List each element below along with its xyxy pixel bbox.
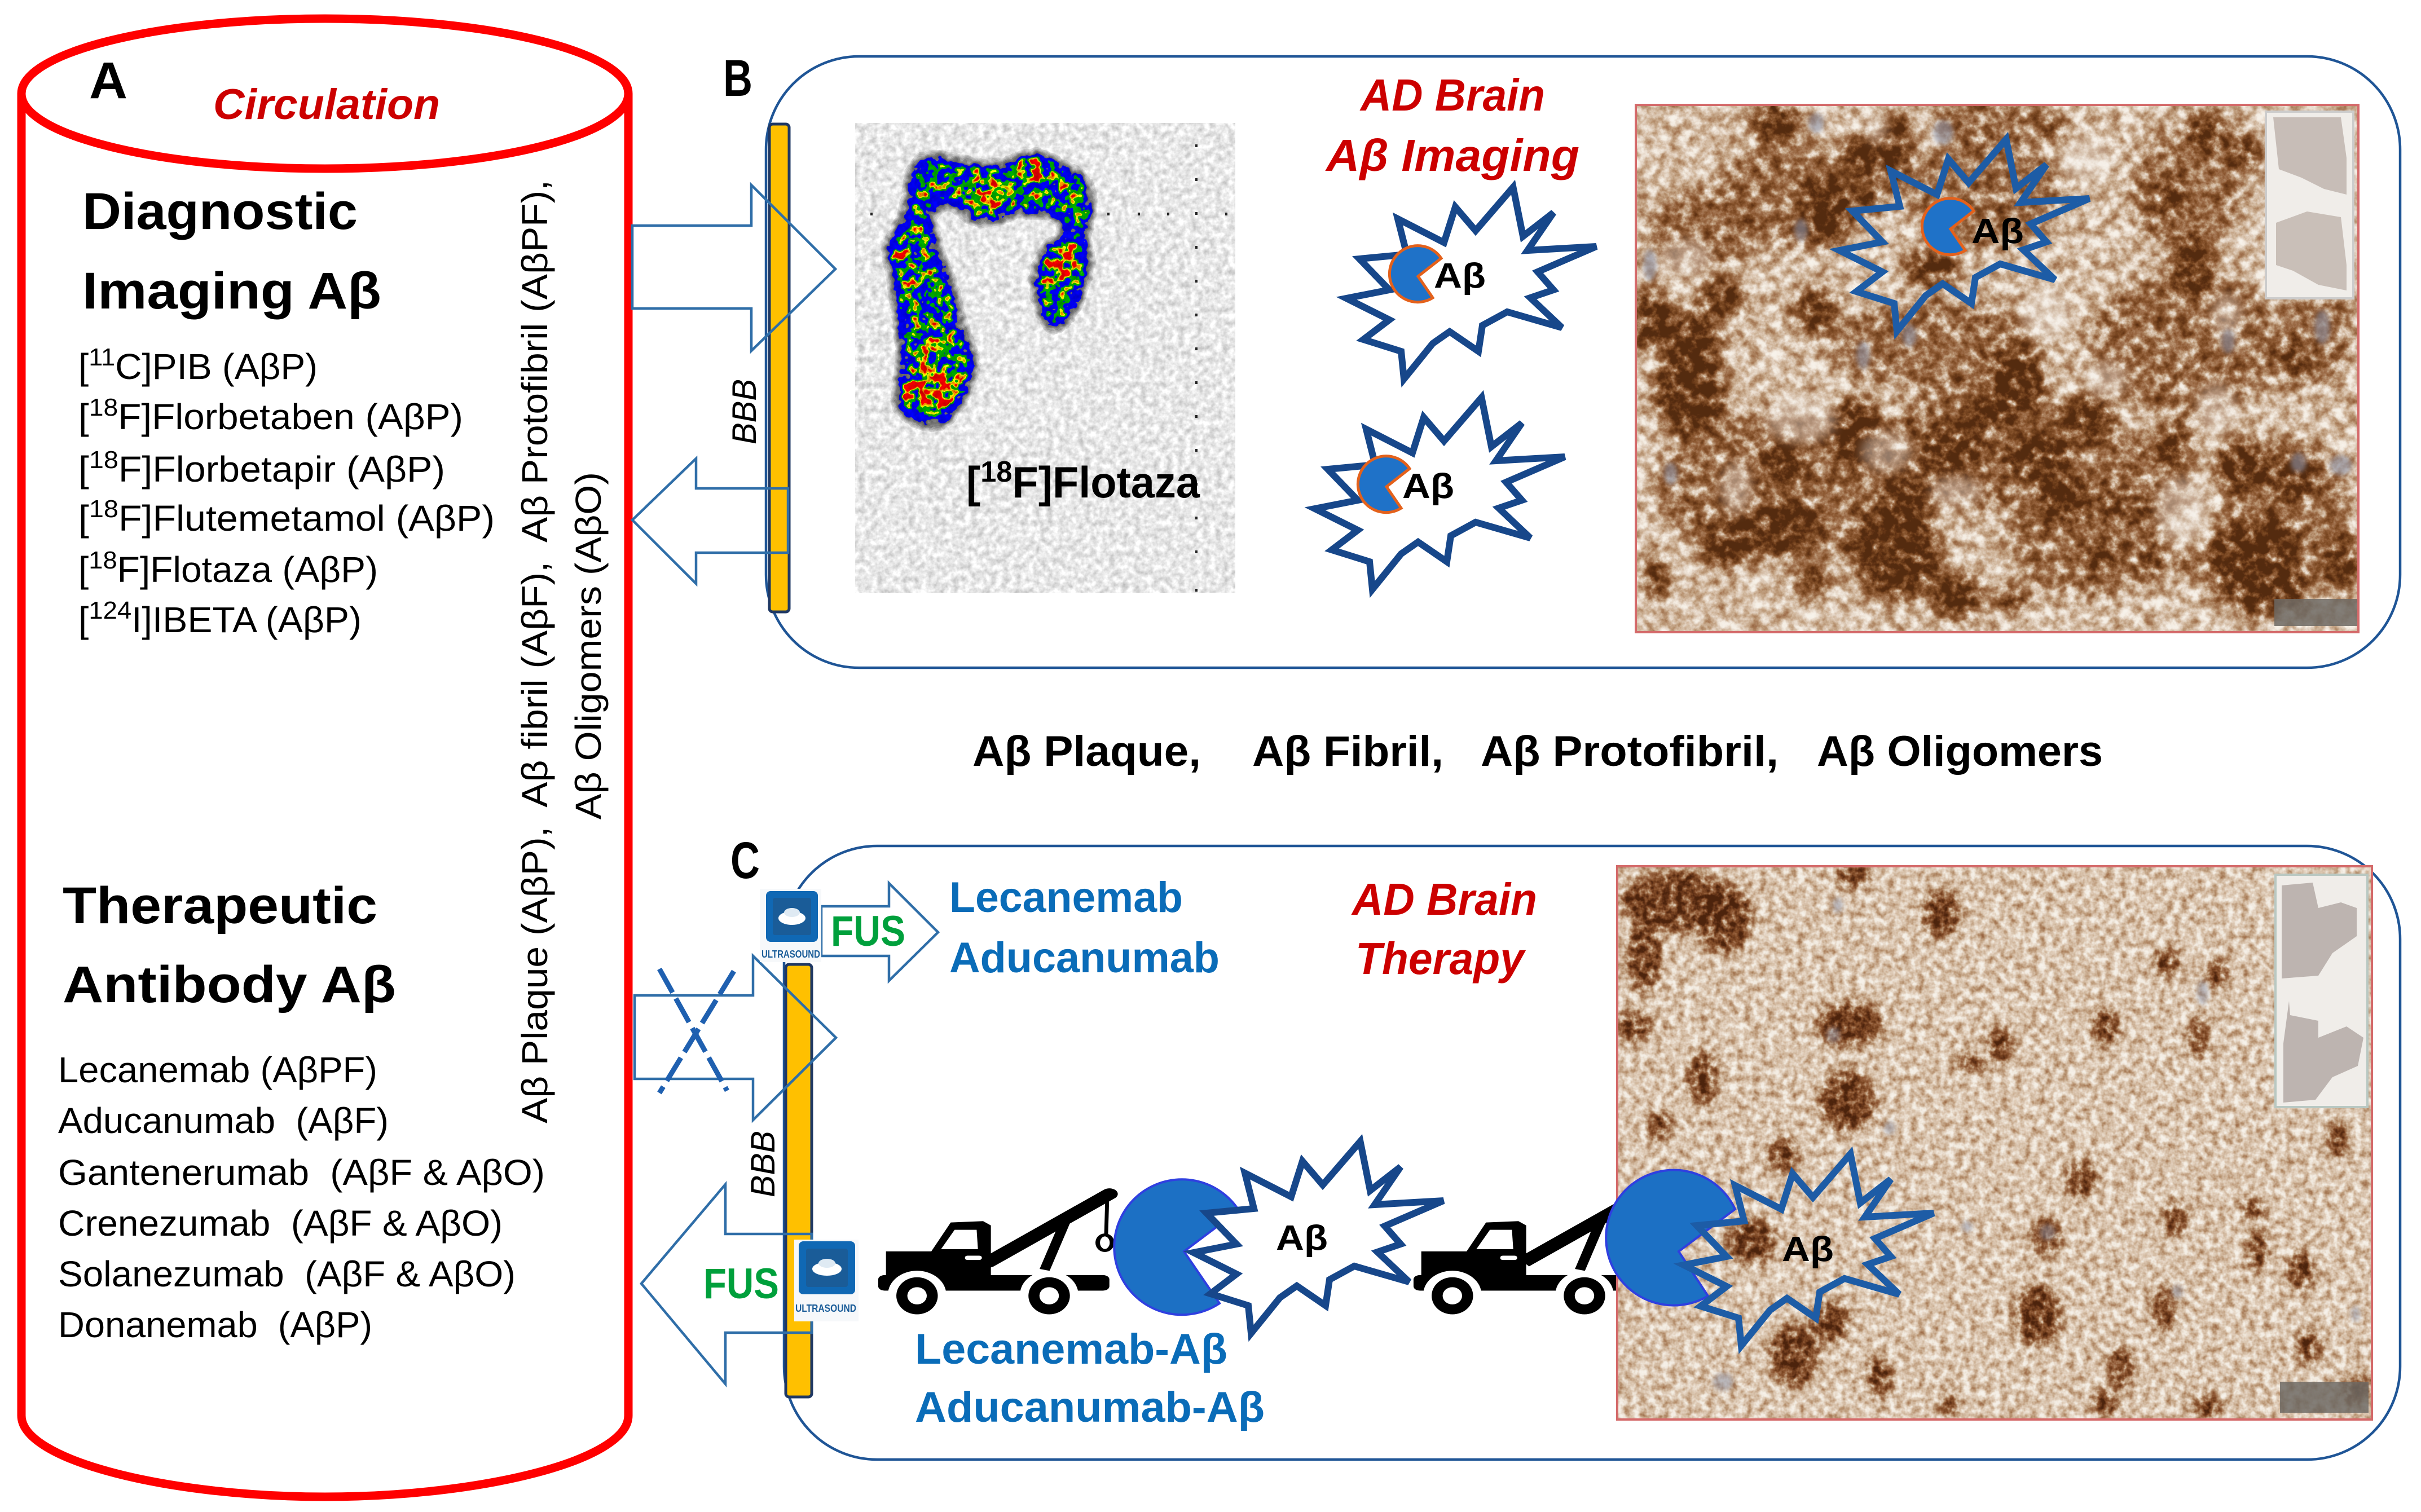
heading: AD brain imaging: Aβ Imaging: [1325, 130, 1579, 180]
dark plaques B: [1631, 104, 2357, 617]
border C: [1617, 866, 2372, 1420]
arrow: out of brain B: [632, 459, 788, 584]
heading: therapeutic antibody: Therapeutic: [63, 877, 377, 934]
icon: ultrasound bottom: ULTRASOUND: [795, 1303, 856, 1314]
list: imaging tracers: [: [78, 498, 89, 539]
center caption: amyloid species: Aβ Fibril,: [1252, 728, 1443, 775]
blood brain barrier bar C: [786, 964, 812, 1397]
list: imaging tracers: 18: [89, 546, 117, 574]
heading: AD brain therapy: [1351, 874, 1537, 984]
antibody amyloid complex names: Lecanemab-Aβ: [915, 1325, 1227, 1373]
BBB label C: BBB: [744, 1131, 782, 1197]
PET scan image: [855, 123, 1235, 593]
center caption: amyloid species: Aβ Protofibril,: [1481, 728, 1779, 775]
antibody names: Aducanumab: [949, 934, 1220, 982]
micrograph C: treated tissue: [1614, 865, 2372, 1420]
list: imaging tracers: [: [78, 549, 89, 590]
heading: diagnostic imaging: [82, 183, 381, 320]
amyloid star with tracer 1: Aβ: [1434, 257, 1486, 296]
list: therapeutic antibodies: Gantenerumab (AβF & AβO): [58, 1152, 545, 1193]
icon: tow truck 2: [1414, 1194, 1645, 1318]
dot ruler: [870, 144, 1227, 592]
antibody pacman capturing amyloid star: [1114, 1141, 1443, 1333]
list: therapeutic antibodies: Crenezumab (AβF & AβO): [58, 1203, 503, 1244]
center caption: amyloid species: [972, 728, 2103, 775]
tracer label: 18: [980, 456, 1012, 488]
panel letter B: B: [723, 50, 752, 107]
list: therapeutic antibodies: Solanezumab (AβF & AβO): [58, 1254, 516, 1294]
amyloid star on micrograph B: [1839, 139, 2089, 331]
heading: AD brain imaging: AD Brain: [1359, 70, 1545, 120]
list: therapeutic antibodies: Aducanumab (AβF): [58, 1100, 389, 1141]
antibody names: Lecanemab: [949, 874, 1183, 922]
icon: ultrasound top: [760, 889, 821, 962]
BBB label B: BBB: [725, 379, 763, 444]
vertical label: amyloid species: Aβ Oligomers (AβO): [568, 472, 609, 819]
amyloid star on micrograph B: Aβ: [1971, 212, 2024, 251]
list: therapeutic antibodies: Lecanemab (AβPF): [58, 1050, 377, 1090]
icon: tow truck 1: [878, 1191, 1112, 1318]
heading: therapeutic antibody: [63, 877, 396, 1013]
list: imaging tracers: F]Florbetaben (AβP): [118, 396, 463, 437]
blood brain barrier bar B: [769, 124, 789, 612]
micrograph B: amyloid stained tissue: [1631, 95, 2358, 632]
list: imaging tracers: 11: [89, 343, 115, 371]
list: imaging tracers: C]PIB (AβP): [115, 346, 318, 387]
heading: diagnostic imaging: Imaging Aβ: [82, 262, 381, 320]
mid tone patches B: [1646, 95, 2352, 596]
slide thumbnail inset B: [2266, 112, 2353, 298]
amyloid star with tracer 1: [1346, 187, 1596, 379]
icon: ultrasound top: ULTRASOUND: [761, 949, 820, 960]
heading: therapeutic antibody: Antibody Aβ: [63, 956, 396, 1013]
amyloid star on micrograph C: Aβ: [1782, 1230, 1834, 1269]
antibody amyloid complex names: Aducanumab-Aβ: [915, 1383, 1265, 1431]
antibody pacman on micrograph: [1606, 1170, 1735, 1306]
list: imaging tracers: 18: [89, 495, 118, 523]
list: imaging tracers: F]Florbetapir (AβP): [118, 449, 445, 490]
list: imaging tracers: 18: [89, 394, 118, 421]
list: imaging tracers: 18: [89, 446, 118, 474]
antibody amyloid complex names: [915, 1325, 1265, 1431]
heading: diagnostic imaging: Diagnostic: [82, 183, 358, 240]
tracer label: [: [966, 457, 981, 507]
heading: AD brain imaging: [1325, 70, 1579, 180]
vertical label: amyloid species: Aβ Plaque (AβP), Aβ fibril (AβF), Aβ Protofibril (AβPF),: [514, 180, 555, 1123]
list: imaging tracers: [: [78, 599, 89, 640]
panel letter C: C: [730, 832, 760, 889]
list: imaging tracers: 124: [89, 597, 131, 624]
list: imaging tracers: [: [78, 346, 89, 387]
amyloid star on micrograph C: [1684, 1154, 1934, 1346]
cell nuclei C: [1713, 897, 2360, 1391]
slide thumbnail inset C: [2275, 875, 2367, 1107]
cell nuclei B: [1643, 113, 2352, 485]
blocked arrow into brain: [635, 956, 836, 1120]
antibody pacman capturing amyloid star: Aβ: [1276, 1219, 1328, 1258]
amyloid star with tracer 2: [1315, 398, 1565, 589]
circulation label: Circulation: [213, 81, 440, 129]
list: imaging tracers: I]IBETA (AβP): [131, 599, 362, 640]
amyloid star with tracer 2: Aβ: [1402, 467, 1454, 506]
icon: ultrasound bottom: [794, 1240, 859, 1321]
FUS label top: FUS: [831, 907, 905, 955]
list: therapeutic antibodies: [58, 1050, 545, 1345]
heading: AD brain therapy: Therapy: [1355, 933, 1526, 984]
panel A: circulation cylinder: [21, 19, 628, 1497]
heading: AD brain therapy: AD Brain: [1351, 874, 1537, 924]
border B: [1636, 105, 2358, 632]
list: therapeutic antibodies: Donanemab (AβP): [58, 1304, 372, 1345]
list: imaging tracers: [: [78, 396, 89, 437]
arrow: FUS mediated entry: [821, 883, 938, 981]
antibody names: [949, 874, 1220, 982]
list: imaging tracers: F]Flutemetamol (AβP): [118, 498, 495, 539]
pale gaps B: [1661, 113, 2242, 541]
list: imaging tracers: F]Flotaza (AβP): [117, 549, 378, 590]
FUS label bottom: FUS: [703, 1260, 779, 1308]
center caption: amyloid species: Aβ Plaque,: [972, 728, 1201, 775]
scale label box B: [2274, 599, 2357, 626]
arrow: into brain B: [632, 185, 835, 351]
tracer label: F]Flotaza: [1012, 457, 1200, 507]
cylinder outline: [21, 19, 628, 1497]
list: imaging tracers: [78, 343, 495, 640]
panel letter A: A: [89, 52, 127, 109]
panel B outline: [766, 56, 2400, 668]
dashed cross over arrow: [659, 969, 734, 1093]
scale label box C: [2280, 1382, 2369, 1413]
panel C outline: [784, 846, 2400, 1460]
arrow: FUS mediated exit: [641, 1184, 812, 1384]
list: imaging tracers: [: [78, 449, 89, 490]
center caption: amyloid species: Aβ Oligomers: [1817, 728, 2103, 775]
vertical label: amyloid species: [514, 180, 609, 1123]
